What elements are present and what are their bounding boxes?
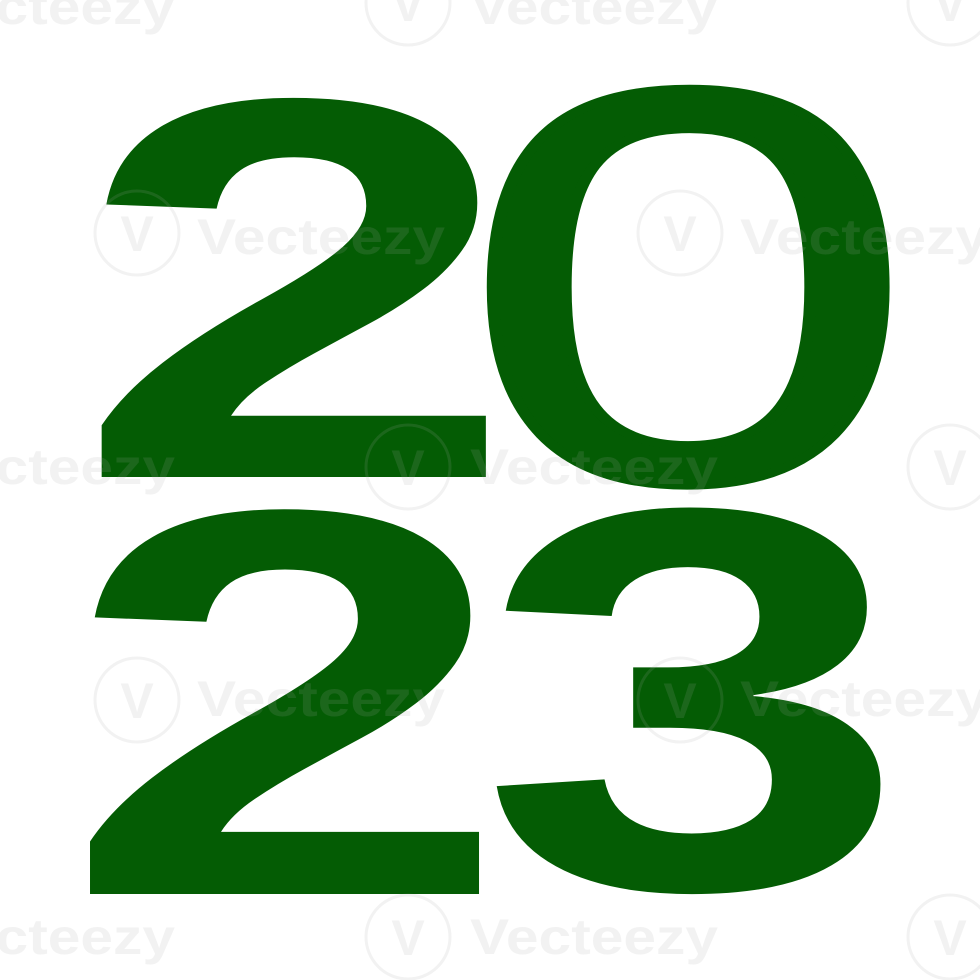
watermark: repeated logo and wordmark: V bbox=[933, 440, 967, 496]
digit: first 2: 2 bbox=[74, 0, 518, 592]
watermark: repeated logo and wordmark: Vecteezy bbox=[197, 209, 445, 265]
watermark: repeated logo and wordmark: V bbox=[391, 910, 425, 966]
watermark: repeated logo and wordmark: V bbox=[933, 910, 967, 966]
watermark: repeated logo and wordmark: Vecteezy bbox=[740, 209, 980, 265]
watermark: repeated logo and wordmark: V bbox=[391, 440, 425, 496]
watermark: repeated logo and wordmark: Vecteezy bbox=[197, 671, 445, 727]
watermark: repeated logo and wordmark: Vecteezy bbox=[470, 439, 718, 495]
watermark: repeated logo and wordmark: Vecteezy bbox=[740, 671, 980, 727]
watermark: repeated logo and wordmark: V bbox=[120, 206, 154, 262]
watermark: repeated logo and wordmark: Vecteezy bbox=[470, 909, 718, 965]
watermark: repeated logo and wordmark: V bbox=[120, 673, 154, 729]
watermark: repeated logo and wordmark: V bbox=[663, 206, 697, 262]
watermark: repeated logo and wordmark: V bbox=[663, 673, 697, 729]
